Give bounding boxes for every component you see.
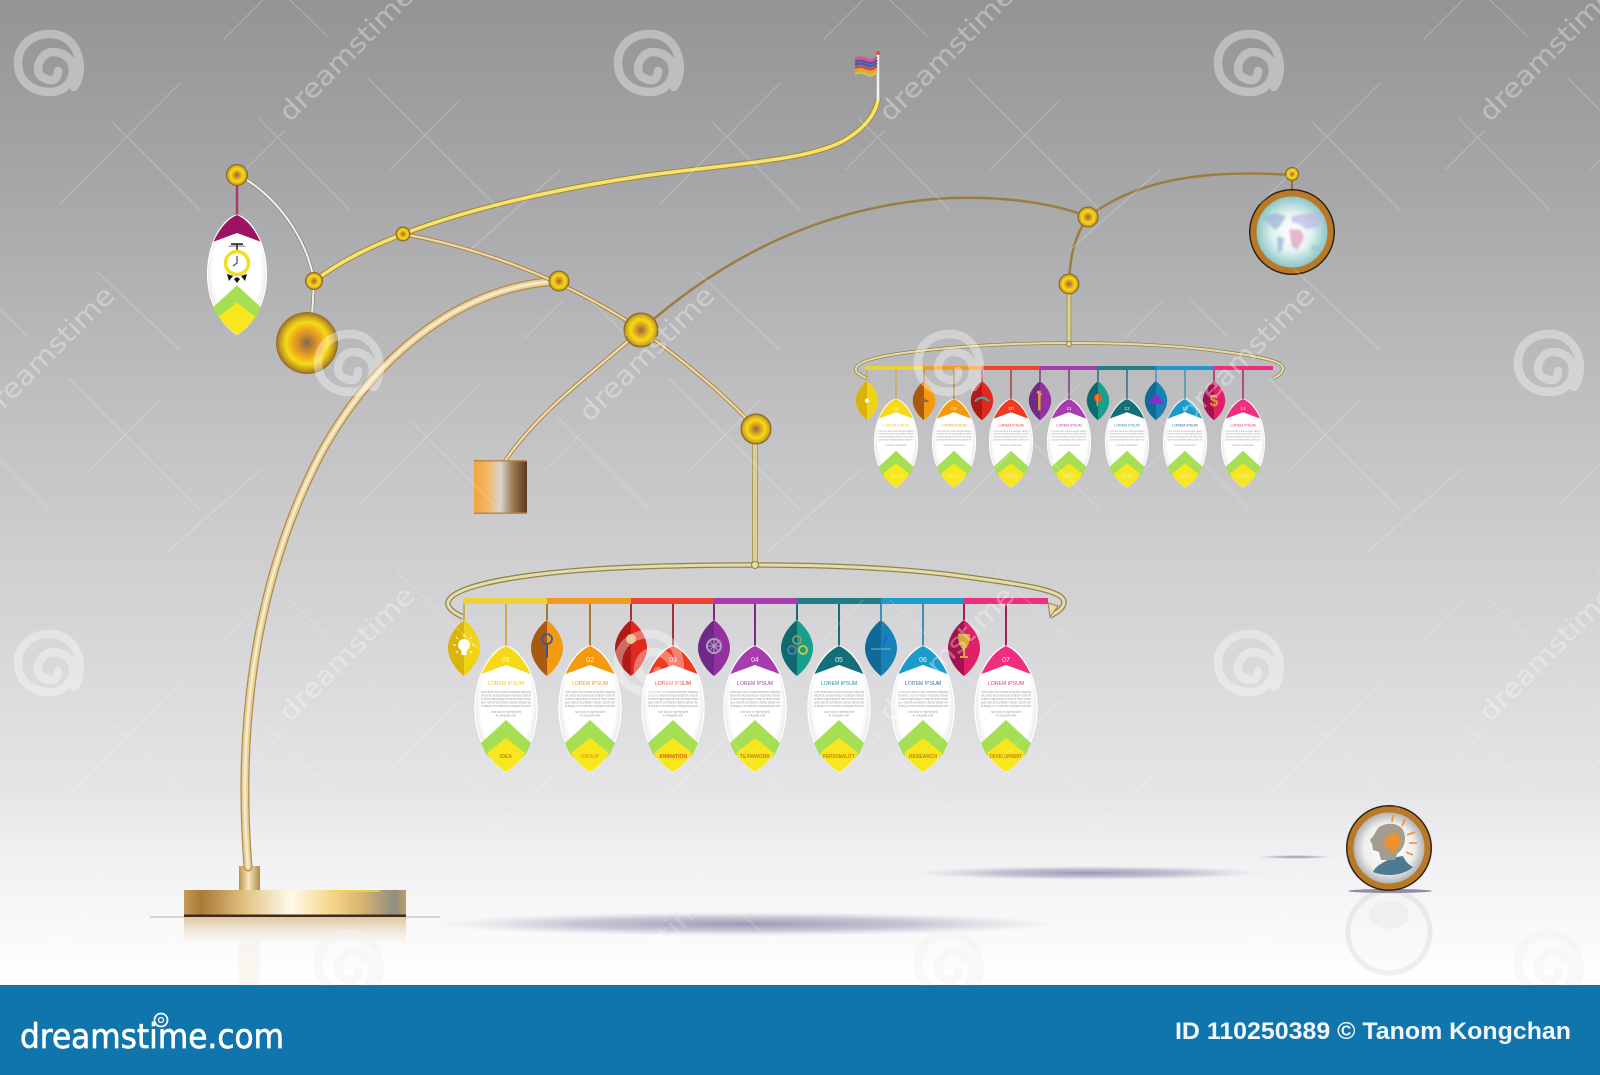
small leaf icon: dollar: $ xyxy=(1210,393,1219,410)
joint nodes xyxy=(226,164,1298,444)
card 14: 14 xyxy=(1240,406,1246,412)
card 14: quis nostrud exercitation ullamco laboris nisi xyxy=(1226,438,1261,441)
card 07 development: elit sed do eiusmod tempor incididunt ut labore xyxy=(981,694,1031,698)
small leaf icon: telephone xyxy=(971,381,993,420)
card 13: Lorem ipsum dolor sit amet consectetur adipiscing xyxy=(1168,430,1203,433)
card 08: quis nostrud exercitation ullamco laboris nisi xyxy=(879,438,914,441)
card 07 development: in voluptate velit xyxy=(996,714,1016,718)
card 11: elit sed do eiusmod tempor incididunt ut labore xyxy=(1052,433,1087,436)
card 09: 2015 xyxy=(948,474,960,480)
card 03 animation: et dolore magna aliqua ut enim ad minim veniam xyxy=(648,697,698,701)
card 04 teamwork: 04 xyxy=(751,657,759,664)
small mobile: hanging strings xyxy=(867,370,1243,399)
stand: base xyxy=(150,866,440,917)
small leaf icon: star xyxy=(856,381,878,420)
card 10: Irure dolor in reprehenderit xyxy=(1001,444,1022,447)
card 01 idea: elit sed do eiusmod tempor incididunt ut labore xyxy=(481,694,531,698)
card 01 idea: quis nostrud exercitation ullamco laboris nisi xyxy=(481,700,531,704)
arm: long wire through the centre node xyxy=(403,234,756,429)
card 07 development: LOREM IPSUM xyxy=(988,681,1024,687)
card 05 personality: LOREM IPSUM xyxy=(821,681,857,687)
card 04 teamwork xyxy=(724,646,786,772)
reflection of the head medallion xyxy=(1348,891,1430,973)
card 03 animation: 03 xyxy=(669,657,677,664)
card 05 personality: Lorem ipsum dolor sit amet consectetur adipiscing xyxy=(814,690,864,694)
card 02 group xyxy=(559,646,621,772)
card 09: et dolore magna aliqua ut enim ad minim veniam xyxy=(937,435,972,438)
arm: white wire between top nodes xyxy=(247,180,314,316)
leaf icon: gears xyxy=(781,620,813,676)
card 01 idea: ut aliquip ex ea commodo consequat duis aute xyxy=(481,704,531,708)
small mobile: colour bar xyxy=(865,366,1273,370)
small leaf icon: wrench xyxy=(1029,381,1051,420)
card 05 personality: 05 xyxy=(835,657,843,664)
card 14 xyxy=(1221,399,1265,487)
large mobile: hanging strings xyxy=(464,604,1006,646)
card 05 personality: in voluptate velit xyxy=(829,714,849,718)
card 10 xyxy=(989,399,1033,487)
card 07 development xyxy=(975,646,1037,772)
small leaf icon: hat xyxy=(913,381,935,420)
card 09: quis nostrud exercitation ullamco laboris nisi xyxy=(937,438,972,441)
arm: yellow wire to flag xyxy=(314,100,878,281)
card 14: 2020 xyxy=(1237,474,1249,480)
watermark words: dreamstime xyxy=(573,880,721,1028)
arm: brown wires to the right mobile xyxy=(641,173,1292,330)
leaf icon: badge xyxy=(615,620,647,676)
leaf icon: trophy xyxy=(948,620,980,676)
flag xyxy=(855,51,880,100)
card 12: Irure dolor in reprehenderit xyxy=(1117,444,1138,447)
card 05 personality: quis nostrud exercitation ullamco laboris nisi xyxy=(814,700,864,704)
card 04 teamwork: ut aliquip ex ea commodo consequat duis aute xyxy=(730,704,780,708)
card 13: et dolore magna aliqua ut enim ad minim veniam xyxy=(1168,435,1203,438)
card 08: et dolore magna aliqua ut enim ad minim veniam xyxy=(879,435,914,438)
card 10: 2016 xyxy=(1005,474,1017,480)
card 11: 11 xyxy=(1066,406,1072,412)
card 12: LOREM IPSUM xyxy=(1114,423,1140,427)
card 08: Irure dolor in reprehenderit xyxy=(886,444,907,447)
arm: wire to counterweight xyxy=(505,330,641,461)
card 04 teamwork: Lorem ipsum dolor sit amet consectetur adipiscing xyxy=(730,690,780,694)
card 10: LOREM IPSUM xyxy=(998,423,1024,427)
small leaf icon: dollar xyxy=(1203,381,1225,420)
small leaf icon: parking sign xyxy=(1087,381,1109,420)
card 08: elit sed do eiusmod tempor incididunt ut labore xyxy=(879,433,914,436)
card 06 research: quis nostrud exercitation ullamco laboris nisi xyxy=(898,700,948,704)
card 01 idea: IDEA xyxy=(500,754,512,760)
card 04 teamwork: TEAMWORK xyxy=(740,754,770,760)
card 03 animation: Lorem ipsum dolor sit amet consectetur adipiscing xyxy=(648,690,698,694)
card 04 teamwork: in voluptate velit xyxy=(745,714,765,718)
card 13: 2019 xyxy=(1179,474,1191,480)
reflection of the base xyxy=(184,917,406,985)
card 07 development: 07 xyxy=(1002,657,1010,664)
card 06 research: RESEARCH xyxy=(909,754,937,760)
card 07 development: ut aliquip ex ea commodo consequat duis aute xyxy=(981,704,1031,708)
stand: main curved arm xyxy=(245,281,559,867)
card 01 idea: LOREM IPSUM xyxy=(488,681,524,687)
leaf icon: key xyxy=(531,620,563,676)
card 09: elit sed do eiusmod tempor incididunt ut labore xyxy=(937,433,972,436)
watermark spirals near floor xyxy=(318,934,1580,992)
card 02 group: Lorem ipsum dolor sit amet consectetur adipiscing xyxy=(565,690,615,694)
card 07 development: et dolore magna aliqua ut enim ad minim veniam xyxy=(981,697,1031,701)
card 04 teamwork: et dolore magna aliqua ut enim ad minim veniam xyxy=(730,697,780,701)
card 09: 09 xyxy=(951,406,957,412)
card 02 group: GROUP xyxy=(581,754,600,760)
card 05 personality: PERSONALITY xyxy=(823,754,856,760)
stem: large mobile xyxy=(752,429,758,565)
card 11: LOREM IPSUM xyxy=(1056,423,1082,427)
card 08: 08 xyxy=(893,406,899,412)
clock pendant xyxy=(208,186,266,335)
card 09: LOREM IPSUM xyxy=(941,423,967,427)
card 09 xyxy=(932,399,976,487)
card 06 research: 06 xyxy=(919,657,927,664)
counterweight bucket xyxy=(474,460,527,514)
card 12: quis nostrud exercitation ullamco laboris nisi xyxy=(1110,438,1145,441)
golden counterweight ball xyxy=(276,312,338,374)
card 05 personality: et dolore magna aliqua ut enim ad minim veniam xyxy=(814,697,864,701)
card 10: quis nostrud exercitation ullamco laboris nisi xyxy=(994,438,1029,441)
watermark words: dreamstime xyxy=(273,580,421,728)
card 08: Lorem ipsum dolor sit amet consectetur adipiscing xyxy=(879,430,914,433)
card 01 idea: in voluptate velit xyxy=(496,714,516,718)
card 01 idea: 01 xyxy=(502,657,510,664)
card 06 research xyxy=(892,646,954,772)
card 10: Lorem ipsum dolor sit amet consectetur adipiscing xyxy=(994,430,1029,433)
card 07 development: Irure dolor in reprehenderit xyxy=(991,710,1021,714)
card 08 xyxy=(874,399,918,487)
card 10: et dolore magna aliqua ut enim ad minim veniam xyxy=(994,435,1029,438)
card 02 group: quis nostrud exercitation ullamco laboris nisi xyxy=(565,700,615,704)
card 05 personality: ut aliquip ex ea commodo consequat duis aute xyxy=(814,704,864,708)
large mobile: hoop xyxy=(448,562,1064,617)
card 07 development: Lorem ipsum dolor sit amet consectetur adipiscing xyxy=(981,690,1031,694)
card 13: elit sed do eiusmod tempor incididunt ut labore xyxy=(1168,433,1203,436)
card 11: et dolore magna aliqua ut enim ad minim veniam xyxy=(1052,435,1087,438)
card 05 personality: Irure dolor in reprehenderit xyxy=(824,710,854,714)
card 05 personality xyxy=(808,646,870,772)
card 02 group: in voluptate velit xyxy=(580,714,600,718)
watermark words: dreamstime xyxy=(873,580,1021,728)
card 08: 2014 xyxy=(890,474,903,480)
card 13: Irure dolor in reprehenderit xyxy=(1175,444,1196,447)
card 12 xyxy=(1105,399,1149,487)
card 12: elit sed do eiusmod tempor incididunt ut labore xyxy=(1110,433,1145,436)
leaf icon: wheel xyxy=(698,620,730,676)
card 02 group: elit sed do eiusmod tempor incididunt ut labore xyxy=(565,694,615,698)
card 03 animation: LOREM IPSUM xyxy=(655,681,691,687)
card 07 development: quis nostrud exercitation ullamco laboris nisi xyxy=(981,700,1031,704)
leaf icon: pen on desk xyxy=(865,620,897,676)
card 05 personality: elit sed do eiusmod tempor incididunt ut labore xyxy=(814,694,864,698)
card 07 development: DEVELOPMENT xyxy=(990,754,1022,760)
card 03 animation: ut aliquip ex ea commodo consequat duis aute xyxy=(648,704,698,708)
card 01 idea: Irure dolor in reprehenderit xyxy=(491,710,521,714)
footer band xyxy=(0,985,1600,1075)
card 06 research: elit sed do eiusmod tempor incididunt ut labore xyxy=(898,694,948,698)
card 14: LOREM IPSUM xyxy=(1230,423,1256,427)
card 03 animation: elit sed do eiusmod tempor incididunt ut labore xyxy=(648,694,698,698)
card 14: elit sed do eiusmod tempor incididunt ut labore xyxy=(1226,433,1261,436)
card 03 animation xyxy=(642,646,704,772)
card 14: Lorem ipsum dolor sit amet consectetur adipiscing xyxy=(1226,430,1261,433)
card 13: 13 xyxy=(1182,406,1188,412)
card 03 animation: in voluptate velit xyxy=(663,714,683,718)
card 03 animation: quis nostrud exercitation ullamco laboris nisi xyxy=(648,700,698,704)
card 12: et dolore magna aliqua ut enim ad minim veniam xyxy=(1110,435,1145,438)
large mobile xyxy=(448,562,1064,772)
card 14: et dolore magna aliqua ut enim ad minim veniam xyxy=(1226,435,1261,438)
head medallion xyxy=(1347,806,1431,890)
large mobile: colour bar xyxy=(463,598,1048,604)
card 11: 2017 xyxy=(1063,474,1075,480)
card 04 teamwork: elit sed do eiusmod tempor incididunt ut labore xyxy=(730,694,780,698)
small leaf icon: pyramid xyxy=(1145,381,1167,420)
card 06 research: LOREM IPSUM xyxy=(905,681,941,687)
card 06 research: Irure dolor in reprehenderit xyxy=(908,710,938,714)
card 02 group: LOREM IPSUM xyxy=(572,681,608,687)
card 13: quis nostrud exercitation ullamco laboris nisi xyxy=(1168,438,1203,441)
card 09: Lorem ipsum dolor sit amet consectetur adipiscing xyxy=(937,430,972,433)
card 01 idea xyxy=(475,646,537,772)
card 06 research: Lorem ipsum dolor sit amet consectetur adipiscing xyxy=(898,690,948,694)
watermark words: dreamstime xyxy=(573,280,721,428)
small mobile: hoop xyxy=(856,342,1283,378)
card 06 research: ut aliquip ex ea commodo consequat duis aute xyxy=(898,704,948,708)
card 10: elit sed do eiusmod tempor incididunt ut labore xyxy=(994,433,1029,436)
card 10: 10 xyxy=(1008,406,1014,412)
card 12: 12 xyxy=(1124,406,1130,412)
card 13 xyxy=(1163,399,1207,487)
card 02 group: et dolore magna aliqua ut enim ad minim veniam xyxy=(565,697,615,701)
watermark spirals xyxy=(18,34,1580,692)
watermark words: dreamstime xyxy=(1173,280,1321,428)
card 06 research: et dolore magna aliqua ut enim ad minim veniam xyxy=(898,697,948,701)
floor shadows xyxy=(435,855,1432,936)
card 11 xyxy=(1047,399,1091,487)
footer logo: dreamstime.com xyxy=(20,1017,284,1057)
leaf icon: light bulb xyxy=(448,620,480,676)
card 01 idea: et dolore magna aliqua ut enim ad minim veniam xyxy=(481,697,531,701)
card 12: Lorem ipsum dolor sit amet consectetur adipiscing xyxy=(1110,430,1145,433)
world globe medallion xyxy=(1250,180,1334,274)
stem: small mobile xyxy=(1067,284,1071,344)
card 11: Irure dolor in reprehenderit xyxy=(1059,444,1080,447)
card 02 group: Irure dolor in reprehenderit xyxy=(575,710,605,714)
card 03 animation: ANIMATION xyxy=(659,754,687,760)
card 03 animation: Irure dolor in reprehenderit xyxy=(658,710,688,714)
footer credit: ID 110250389 © Tanom Kongchan xyxy=(1175,1018,1571,1045)
card 04 teamwork: quis nostrud exercitation ullamco laboris nisi xyxy=(730,700,780,704)
card 09: Irure dolor in reprehenderit xyxy=(944,444,965,447)
card 11: quis nostrud exercitation ullamco laboris nisi xyxy=(1052,438,1087,441)
card 02 group: 02 xyxy=(586,657,594,664)
card 08: LOREM IPSUM xyxy=(883,423,909,427)
small mobile xyxy=(856,342,1283,487)
card 12: 2018 xyxy=(1121,474,1133,480)
card 02 group: ut aliquip ex ea commodo consequat duis aute xyxy=(565,704,615,708)
card 06 research: in voluptate velit xyxy=(913,714,933,718)
card 04 teamwork: LOREM IPSUM xyxy=(737,681,773,687)
card 04 teamwork: Irure dolor in reprehenderit xyxy=(740,710,770,714)
card 14: Irure dolor in reprehenderit xyxy=(1233,444,1254,447)
watermark words: dreamstime xyxy=(1173,880,1321,1028)
card 13: LOREM IPSUM xyxy=(1172,423,1198,427)
card 01 idea: Lorem ipsum dolor sit amet consectetur adipiscing xyxy=(481,690,531,694)
card 11: Lorem ipsum dolor sit amet consectetur adipiscing xyxy=(1052,430,1087,433)
